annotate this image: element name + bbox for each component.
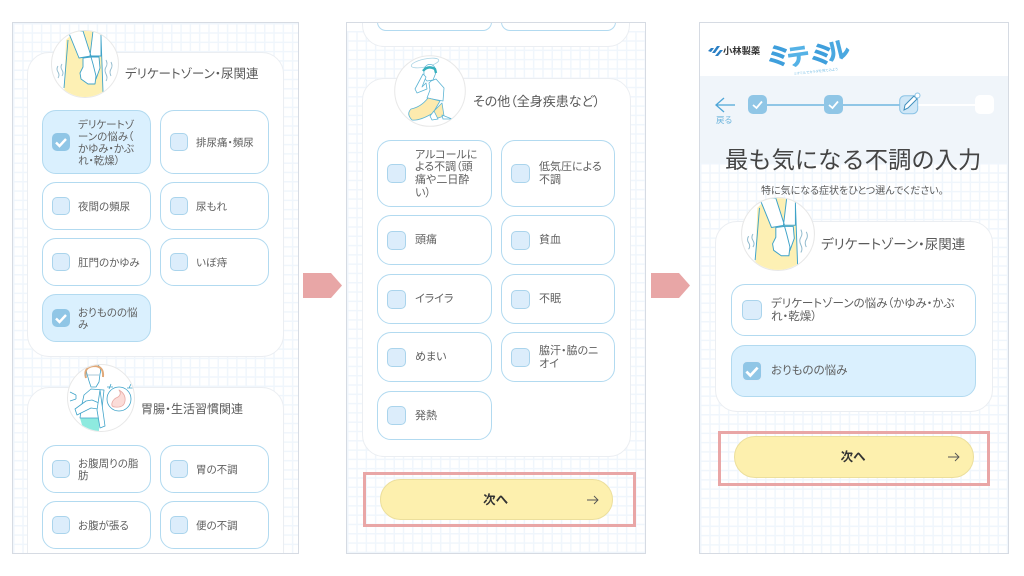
panel: step 1 symptom selection screen [12,22,299,554]
option: fever: 発熱 [415,410,437,422]
option: armpit sweat and odor: 脇汗・脇のニ [539,345,598,357]
option: irritation [377,274,492,324]
step 3 current with pen [899,92,920,114]
logo: Mitemiru: ル [824,35,852,66]
option: alcohol [377,140,492,207]
progress stepper [748,92,994,114]
option: belly fat: 肪 [78,470,88,482]
option: delicate zone concern: デリケートゾーンの悩み（かゆみ・かぶ [771,298,954,310]
option: low pressure [501,140,615,207]
option: nighttime urination: 夜間の頻尿 [78,200,130,212]
icon: arrow [948,452,960,462]
card: other general conditions [362,78,631,457]
option: stool problems: 便の不調 [196,520,238,532]
option: alcohol: 痛や二日酔 [415,174,469,186]
option: delicate zone concern, checked [42,110,151,174]
illustration: kneeling woman with hat [394,55,466,127]
option: stool problems [160,501,269,549]
option: dizziness: めまい [415,351,446,363]
arrow: step 2 to step 3 [651,273,690,298]
option: delicate zone concern, checked: かゆみ・かぶ [78,142,134,154]
previous card remnant [362,0,630,47]
logo: Mitemiru: ミ [809,40,833,69]
option: anemia [501,215,615,265]
logo: Mitemiru: テ [786,42,811,71]
illustration: woman with stomach pain [67,364,135,432]
arrow: step 1 to step 2 [303,273,342,298]
option: nighttime urination [42,182,151,230]
highlight frame: next button [363,472,636,527]
logo: Mitemiru [766,35,852,76]
option: delicate zone concern, checked: れ・乾燥） [78,154,120,166]
option: discharge concern, checked: み [78,318,88,330]
option: anemia: 貧血 [539,234,561,246]
option: delicate zone concern, checked: ーンの悩み（ [78,130,133,142]
heading: delicate zone and urinary: デリケートゾーン・尿関連 [125,67,259,81]
option: dizziness [377,332,492,382]
option: hemorrhoids [160,238,269,286]
option: urine leak [160,182,269,230]
option: insomnia [501,274,615,324]
option: headache: 頭痛 [415,234,437,246]
card: delicate zone and urinary [27,52,284,357]
option: discharge concern, checked: おりものの悩 [78,306,137,318]
heading: stomach and lifestyle: 胃腸・生活習慣関連 [141,402,243,416]
panel: step 3 main concern screen [699,22,1009,554]
option: urine leak: 尿もれ [196,200,227,212]
heading: other general conditions: その他（全身疾患など） [473,94,600,109]
step 1 complete [748,95,767,114]
logo: Kobayashi Pharmaceutical: 小林製薬 [723,46,760,56]
option: bloating: お腹が張る [78,520,129,532]
option: belly fat: お腹周りの脂 [78,458,138,470]
logo: Mitemiru: ミテミルでカラダを見てみよう [793,66,838,76]
option: anal itch: 肛門のかゆみ [78,256,140,268]
option: stomach upset: 胃の不調 [196,464,238,476]
button: next [380,479,613,520]
option: hemorrhoids: いぼ痔 [196,256,227,268]
button: next: 次へ [483,493,508,507]
option: alcohol: い） [415,187,431,199]
option: anal itch [42,238,151,286]
option: discharge concern, checked [731,345,976,397]
option: belly fat [42,445,151,493]
option: fever [377,391,492,440]
option: delicate zone concern, checked: デリケートゾ [78,118,134,130]
panel: step 2 symptom selection screen [346,22,646,554]
button: next [734,436,974,478]
icon: back arrow with label: 戻る [716,115,732,125]
option: delicate zone concern: れ・乾燥） [771,310,817,322]
illustration: hands in front of skirt [51,30,119,98]
option: bloating [42,501,151,549]
heading: delicate zone and urinary: デリケートゾーン・尿関連 [821,237,965,252]
option: alcohol: アルコールに [415,149,477,161]
button: next: 次へ [841,450,865,464]
step 2 complete [824,95,843,114]
card: stomach and lifestyle [27,387,284,576]
card: selected delicate zone [715,221,993,412]
option: irritation: イライラ [415,293,453,305]
subtitle: instruction: 特に気になる症状をひとつ選んでください。 [761,186,944,197]
option: discharge concern, checked: おりものの悩み [771,365,847,377]
option: insomnia: 不眠 [539,293,561,305]
option: urination pain: 排尿痛・頻尿 [196,136,254,148]
band: progress header [700,76,1008,163]
option: delicate zone concern [731,284,976,336]
step 4 pending [975,95,994,114]
option: low pressure: 低気圧による [539,161,602,173]
option: urination pain [160,110,269,174]
option: armpit sweat and odor [501,332,615,382]
icon: arrow [587,496,598,504]
icon: back arrow with label [715,98,735,125]
highlight frame: next button [718,431,990,486]
option: alcohol: よる不調（頭 [415,161,473,173]
option: low pressure: 不調 [539,174,561,186]
logo: Mitemiru: ミ [766,42,790,70]
option: headache [377,215,492,265]
option: stomach upset [160,445,269,493]
heading: main concern input: 最も気になる不調の入力 [725,147,981,173]
option: armpit sweat and odor: オイ [539,358,559,370]
option: discharge concern, checked [42,294,151,342]
illustration: hands in front of skirt [741,197,815,271]
